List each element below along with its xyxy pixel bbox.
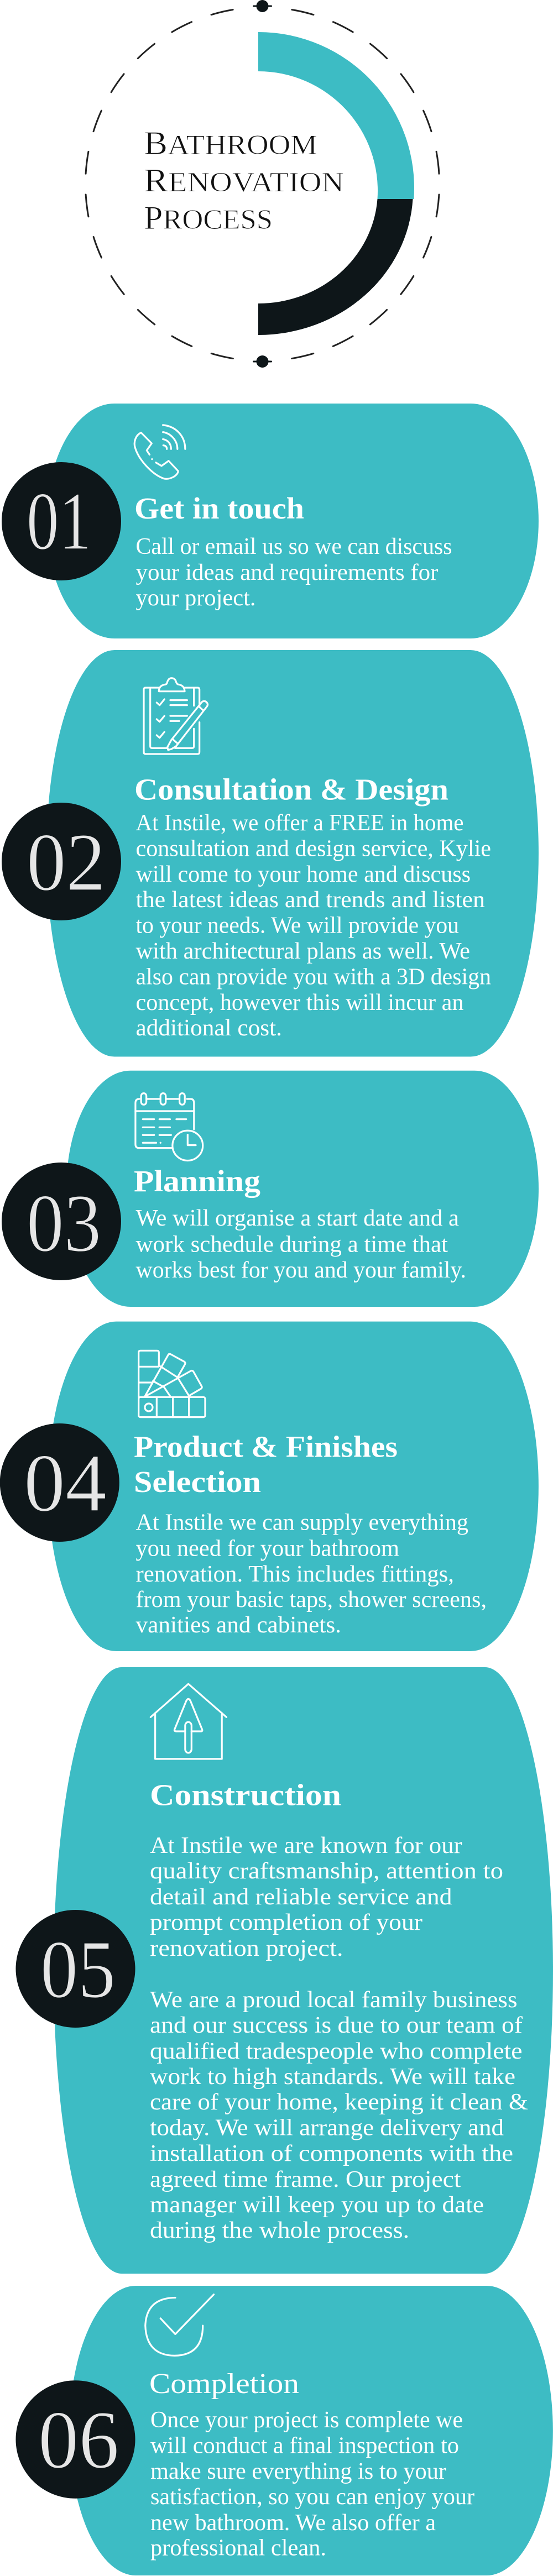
number badge: [15, 1910, 135, 2028]
number badge: [0, 1423, 119, 1542]
heading: Consultation & Design: [134, 773, 448, 806]
title: [144, 125, 344, 236]
icon: house with trowel: [150, 1684, 226, 1759]
panel background: [48, 1322, 539, 1651]
body text: quality craftsmanship, attention to: [150, 1858, 503, 1884]
body text: installation of components with the: [150, 2141, 513, 2166]
black arc: [258, 199, 413, 335]
body text: will conduct a final inspection to: [150, 2433, 459, 2459]
body text: today. We will arrange delivery and: [150, 2115, 504, 2140]
body text: We will organise a start date and a: [136, 1206, 459, 1231]
icon: phone: [134, 425, 185, 479]
body text: your project.: [136, 585, 255, 611]
panel background: [54, 1667, 553, 2274]
panel background: [46, 650, 539, 1057]
dashed ring left half: [85, 7, 262, 361]
body text: Once your project is complete we: [150, 2407, 463, 2433]
panel background: [46, 404, 539, 638]
body text: works best for you and your family.: [136, 1258, 466, 1283]
heading: Get in touch: [134, 491, 304, 525]
number badge: 03: [27, 1177, 101, 1269]
number badge: [2, 462, 121, 580]
body text: care of your home, keeping it clean &: [150, 2090, 528, 2115]
number badge: [2, 1163, 121, 1280]
body text: work schedule during a time that: [136, 1232, 448, 1257]
heading: Construction: [150, 1778, 341, 1812]
body text: [136, 810, 491, 1041]
panel: 02 consultation and design: [2, 650, 539, 1057]
body text: renovation. This includes fittings,: [136, 1562, 454, 1587]
body text: to your needs. We will provide you: [136, 913, 459, 939]
body text: At Instile, we offer a FREE in home: [136, 810, 463, 836]
body text: detail and reliable service and: [150, 1884, 452, 1910]
body text: We are a proud local family business: [150, 1987, 518, 2013]
number badge: 04: [24, 1437, 107, 1529]
body text: with architectural plans as well. We: [136, 939, 470, 964]
body text: consultation and design service, Kylie: [136, 836, 491, 861]
body text: manager will keep you up to date: [150, 2192, 484, 2218]
body text: also can provide you with a 3D design: [136, 964, 491, 989]
number badge: 06: [38, 2394, 119, 2486]
body text: work to high standards. We will take: [150, 2064, 515, 2090]
number badge: [15, 2380, 135, 2499]
body text: from your basic taps, shower screens,: [136, 1587, 487, 1612]
body text: satisfaction, so you can enjoy your: [150, 2484, 474, 2510]
panel background: [66, 1071, 539, 1307]
teal arc: [258, 32, 414, 199]
icon: colour swatches: [139, 1350, 205, 1417]
heading: Completion: [149, 2368, 299, 2400]
dashed ring right half: [262, 7, 439, 361]
panel: 06 completion: [15, 2286, 553, 2575]
number badge: 05: [40, 1924, 116, 2015]
body text: you need for your bathroom: [136, 1536, 399, 1562]
panel background: [70, 2286, 553, 2575]
panel: 04 product and finishes selection: [0, 1322, 539, 1651]
body text: make sure everything is to your: [150, 2459, 446, 2484]
body text: renovation project.: [150, 1936, 343, 1961]
body text: vanities and cabinets.: [136, 1612, 341, 1638]
body text: additional cost.: [136, 1015, 282, 1041]
body text: [136, 1206, 466, 1283]
bottom marker dot: [253, 355, 272, 368]
top marker dot: [253, 0, 272, 12]
icon: check mark: [145, 2295, 214, 2355]
body text: Call or email us so we can discuss: [136, 534, 452, 559]
body text: professional clean.: [150, 2535, 326, 2561]
panel: 03 planning: [2, 1071, 539, 1307]
heading: Planning: [134, 1164, 260, 1198]
body text: will come to your home and discuss: [136, 862, 471, 887]
panel: 05 construction: [15, 1667, 553, 2274]
body text: the latest ideas and trends and listen: [136, 887, 485, 913]
body text: [150, 1833, 528, 2243]
heading: Product & Finishes: [134, 1430, 398, 1464]
body text: during the whole process.: [150, 2218, 409, 2243]
body text: prompt completion of your: [150, 1910, 422, 1935]
body text: new bathroom. We also offer a: [150, 2510, 436, 2536]
body text: [150, 2407, 474, 2561]
heading: [134, 1430, 398, 1499]
title: PROCESS: [144, 200, 273, 236]
icon: calendar: [135, 1093, 203, 1160]
body text: qualified tradespeople who complete: [150, 2039, 522, 2064]
body text: At Instile we are known for our: [150, 1833, 462, 1858]
number badge: [2, 803, 121, 920]
number badge: 02: [27, 816, 106, 908]
heading: Selection: [134, 1465, 261, 1499]
body text: your ideas and requirements for: [136, 560, 439, 585]
panel: 01 get in touch: [2, 404, 539, 638]
body text: At Instile we can supply everything: [136, 1510, 468, 1536]
body text: agreed time frame. Our project: [150, 2167, 461, 2192]
body text: concept, however this will incur an: [136, 990, 463, 1015]
title: RENOVATION: [144, 163, 344, 199]
body text: and our success is due to our team of: [150, 2013, 523, 2038]
body text: [136, 1510, 487, 1638]
icon: clipboard: [144, 678, 208, 754]
body text: [136, 534, 452, 611]
number badge: 01: [27, 475, 91, 567]
title: BATHROOM: [144, 125, 317, 161]
header emblem: [85, 0, 439, 368]
